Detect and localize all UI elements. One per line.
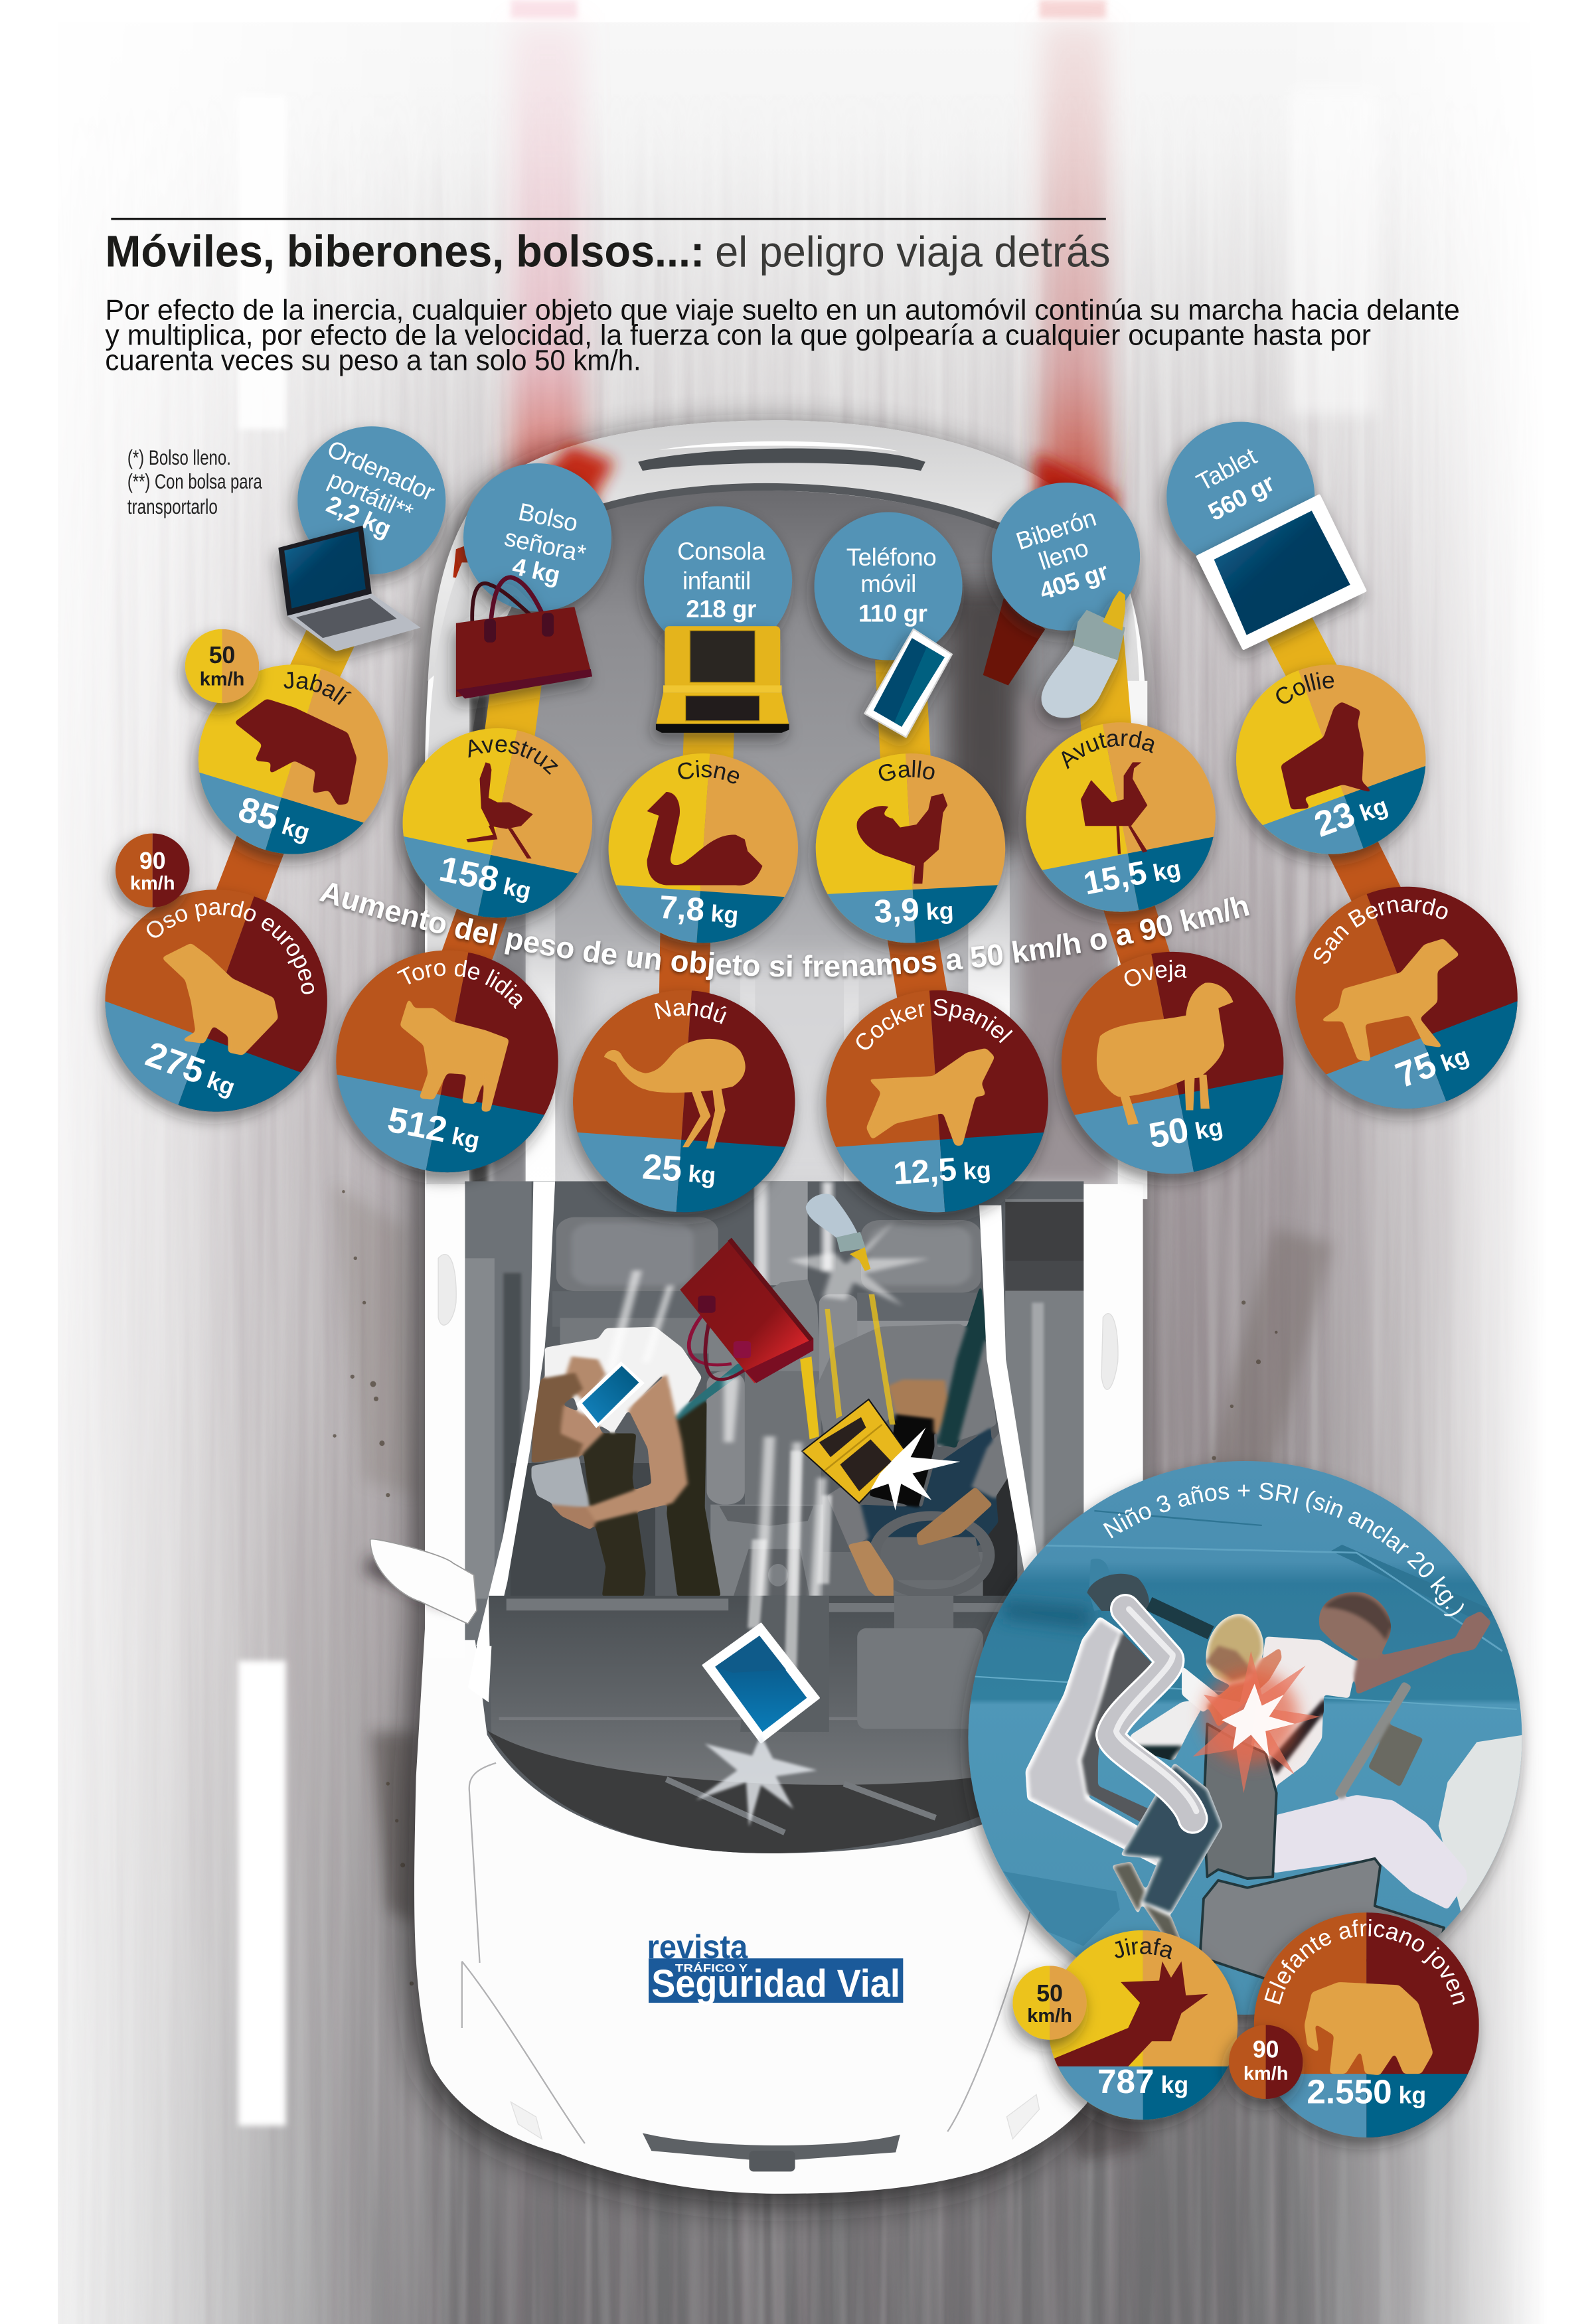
- blue object badges: [297, 422, 1315, 660]
- badge: tablet: Tablet: [1192, 442, 1261, 497]
- intro text: Por efecto de la inercia, cualquier objeto que viaje suelto en un automóvil continúa su marcha hacia delante: [105, 295, 1460, 327]
- console impact flash: [870, 1427, 960, 1510]
- inset right door: [1439, 1735, 1524, 1917]
- badge: Collie: 23 kg: [1309, 783, 1392, 845]
- tablet rays: [748, 1450, 832, 1673]
- rear window rim: [592, 487, 1001, 527]
- yellow connectors: [303, 614, 1320, 770]
- impact burst: [1193, 1651, 1320, 1793]
- intro text: y multiplica, por efecto de la velocidad, la fuerza con la que golpearía a cualquier ocupante hasta por: [105, 320, 1371, 352]
- badge: ordenador: [297, 426, 445, 574]
- badge: tablet: 560 gr: [1204, 469, 1279, 526]
- badge: Avutarda: 15,5 kg: [1081, 848, 1183, 902]
- flying phone: [576, 1361, 645, 1428]
- badge: Collie: [1210, 638, 1455, 886]
- subtitle: el peligro viaja detrás: [715, 227, 1111, 275]
- badge: teléfono: 110 gr: [858, 600, 927, 627]
- badge: Gallo: Gallo: [874, 754, 939, 789]
- side pillars: [426, 562, 1147, 1199]
- badge: Avestruz: Avestruz: [469, 739, 558, 775]
- door skins: [425, 1184, 1143, 1806]
- driver hands: [848, 1487, 993, 1611]
- hood lines: [462, 1763, 1044, 2143]
- car shadow: [408, 431, 1141, 2204]
- tail-light streaks: [513, 22, 1107, 510]
- flying tablet: [703, 1624, 819, 1743]
- object: handbag: [456, 578, 592, 699]
- wipers: [667, 1779, 935, 1833]
- rear spoiler: [638, 441, 925, 471]
- speed tag: 50 km/h top: [185, 629, 259, 703]
- rear deck band: [428, 420, 1140, 696]
- logo small words: TRÁFICO Y: [675, 1962, 748, 1974]
- cabin floor: [465, 1181, 1083, 1853]
- speed tag: 90 km/h top: [116, 833, 189, 907]
- dashboard: [489, 1596, 1066, 1787]
- badge: Oveja: [1042, 933, 1303, 1196]
- logo blue plate: [649, 1958, 903, 2003]
- speed tag: 90 km/h top: 90: [139, 848, 166, 874]
- badge: Cisne: [601, 747, 805, 957]
- badge: Oso pardo europeo: 275 kg: [141, 1035, 242, 1103]
- badge: Elefante africano joven: Elefante africano joven: [1259, 1915, 1474, 2008]
- badge: teléfono: Teléfono: [846, 544, 936, 571]
- badge: teléfono: móvil: [860, 570, 916, 597]
- flying bag: [680, 1238, 813, 1383]
- rear window and interior glass: [468, 491, 1122, 1199]
- badge: biberón: 405 gr: [1036, 558, 1111, 605]
- floors: [511, 1463, 1017, 1596]
- speed tag: 90 km/h bottom: 90: [1253, 2037, 1279, 2063]
- badge: consola: [644, 506, 792, 655]
- curved heading: Aumento del peso de un objeto si frenamos a 50 km/h o a 90 km/h: [317, 874, 1253, 983]
- inset circle: child seat impact: [957, 1460, 1530, 2030]
- badge: bolso: [463, 463, 611, 611]
- badge: Avestruz: 158 kg: [436, 850, 536, 907]
- speed tag: 50 km/h bottom: [1012, 1966, 1087, 2040]
- speed tag: 50 km/h bottom: 50: [1036, 1980, 1063, 2007]
- object: tablet: [1198, 496, 1365, 649]
- badge: San Bernardo: San Bernardo: [1295, 870, 1460, 975]
- badge: ordenador: Ordenador: [323, 435, 439, 506]
- child jeans and shoes: [1113, 1764, 1222, 1944]
- pillar lines: [476, 1182, 1037, 1646]
- windshield base: [487, 1731, 1054, 1853]
- badge: consola: infantil: [682, 568, 751, 595]
- intro text: cuarenta veces su peso a tan solo 50 km/h.: [105, 345, 641, 376]
- badge: Oso pardo europeo: [74, 858, 359, 1144]
- car body: [414, 420, 1147, 2194]
- badge: biberón: [992, 483, 1140, 631]
- badge: Jirafa: [1045, 1930, 1237, 2126]
- skid marks: [333, 1184, 1332, 2161]
- badge: Cocker Spaniel: 12,5 kg: [892, 1149, 992, 1192]
- rear seats: [552, 1217, 983, 1327]
- object: baby bottle: [1042, 591, 1125, 718]
- footnotes: transportarlo: [127, 495, 218, 518]
- badge: Avutarda: [1010, 706, 1233, 933]
- child seat: [1027, 1618, 1184, 1871]
- badge: Jabalí: Jabalí: [283, 672, 352, 705]
- badge: Jabalí: [173, 641, 412, 882]
- motion rays: [605, 1271, 827, 1646]
- central tunnel: [754, 1182, 833, 1285]
- speed tag: 50 km/h top: km/h: [200, 668, 244, 690]
- badge: Elefante africano joven: 2.550 kg: [1307, 2073, 1426, 2111]
- badge: Avutarda: Avutarda: [1050, 716, 1164, 776]
- badge: bolso: 4 kg: [510, 552, 562, 589]
- badge: ordenador: 2,2 kg: [323, 491, 395, 542]
- pillar base left: [468, 1646, 491, 1702]
- badge: Avestruz: [384, 711, 610, 940]
- flying console trail: [800, 1294, 896, 1439]
- object: phone: [864, 629, 952, 737]
- tablet impact flash: [696, 1735, 817, 1827]
- badge: Elefante africano joven: [1254, 1912, 1479, 2140]
- speed tag: 90 km/h top: km/h: [130, 873, 175, 894]
- speed tag: 90 km/h bottom: km/h: [1243, 2063, 1288, 2084]
- badge: Nandú: [565, 983, 803, 1224]
- footnotes: (**) Con bolsa para: [127, 470, 262, 493]
- left door frame: [465, 1181, 532, 1640]
- badge: Collie: Collie: [1267, 660, 1342, 714]
- object: game console: [656, 626, 789, 733]
- logo main words: Seguridad Vial: [651, 1962, 900, 2005]
- inset headrest and belt: [1087, 1574, 1211, 1633]
- inset title: Niño 3 años + SRI (sin anclar 20 kg.): [1103, 1483, 1464, 1616]
- inset driver seat: [1200, 1724, 1444, 1979]
- title: Móviles, biberones, bolsos...:: [105, 226, 705, 276]
- child torso: [1127, 1698, 1207, 1760]
- badge: Cisne: 7,8 kg: [658, 890, 740, 931]
- speed tag: 90 km/h bottom: [1229, 2025, 1303, 2099]
- inset car interior: [974, 1511, 1517, 1946]
- badge: Cocker Spaniel: [819, 983, 1056, 1224]
- top rule: [111, 218, 1106, 220]
- badge: Nandú: Nandú: [650, 992, 732, 1030]
- badge: Gallo: 3,9 kg: [873, 890, 955, 930]
- badge: Toro de lidia: Toro de lidia: [390, 943, 536, 1016]
- interior shading: [469, 585, 1111, 1199]
- centre console: [710, 1505, 823, 1599]
- badge: ordenador: portátil**: [324, 465, 417, 526]
- badge: tablet: [1166, 422, 1315, 570]
- cabin interior: [511, 1182, 1017, 1646]
- seat harness shell: [1111, 1609, 1196, 1819]
- badge: Jabalí: 85 kg: [234, 789, 316, 848]
- speed tag: 50 km/h bottom: km/h: [1027, 2005, 1072, 2027]
- intro text: [105, 295, 1460, 376]
- orange connectors: [230, 836, 1384, 1014]
- bumper fog lights: [511, 2094, 1039, 2139]
- wing mirror: [364, 1539, 477, 1624]
- footnotes: [127, 446, 262, 518]
- speed tag: 50 km/h top: 50: [209, 642, 235, 668]
- badge: biberón: Biberón: [1012, 504, 1099, 555]
- child head and arm: [1182, 1614, 1282, 1727]
- flying bottle: [806, 1194, 870, 1271]
- badge: Toro de lidia: [316, 931, 578, 1196]
- bottle flash: [789, 1220, 929, 1306]
- badge: Oso pardo europeo: Oso pardo europeo: [135, 866, 345, 1004]
- badge: Gallo: [811, 749, 1010, 954]
- driver: [815, 1282, 1008, 1549]
- logo word revista: revista: [647, 1928, 748, 1966]
- inset driver: [1247, 1592, 1491, 1910]
- rear lights inner: [453, 545, 1045, 685]
- footnotes: (*) Bolso lleno.: [127, 446, 231, 469]
- badge: Nandú: 25 kg: [641, 1147, 718, 1192]
- seat cushions: [560, 1279, 971, 1505]
- badge: Jirafa: 787 kg: [1097, 2062, 1188, 2100]
- steering wheel: [861, 1516, 989, 1646]
- badge: Jirafa: Jirafa: [1109, 1932, 1177, 1964]
- car: [364, 420, 1147, 2204]
- badge: teléfono: [815, 512, 963, 660]
- badge: bolso: señora*: [502, 524, 588, 568]
- flying console: [802, 1399, 907, 1503]
- woman passenger: [531, 1327, 745, 1596]
- badge: biberón: lleno: [1036, 534, 1091, 576]
- badge: Oveja: 50 kg: [1146, 1104, 1226, 1156]
- connector strips: [230, 614, 1384, 1014]
- right door frame: [1005, 1199, 1083, 1643]
- badge: bolso: Bolso: [516, 498, 580, 537]
- logo: revista Tráfico y Seguridad Vial: [647, 1928, 903, 2005]
- badge: San Bernardo: 75 kg: [1391, 1033, 1473, 1096]
- badge: Cisne: Cisne: [678, 760, 740, 783]
- object: laptop: [278, 526, 420, 651]
- badge: Oveja: Oveja: [1118, 951, 1193, 995]
- badge: consola: 218 gr: [686, 595, 756, 623]
- badge: San Bernardo: [1263, 854, 1552, 1146]
- badge: consola: Consola: [677, 538, 765, 565]
- front grille: [643, 2133, 900, 2171]
- red corner glow: [511, 444, 1118, 551]
- badge: Toro de lidia: 512 kg: [384, 1100, 484, 1156]
- badge: Cocker Spaniel: Cocker Spaniel: [846, 988, 1018, 1058]
- centre stack: [857, 1596, 983, 1729]
